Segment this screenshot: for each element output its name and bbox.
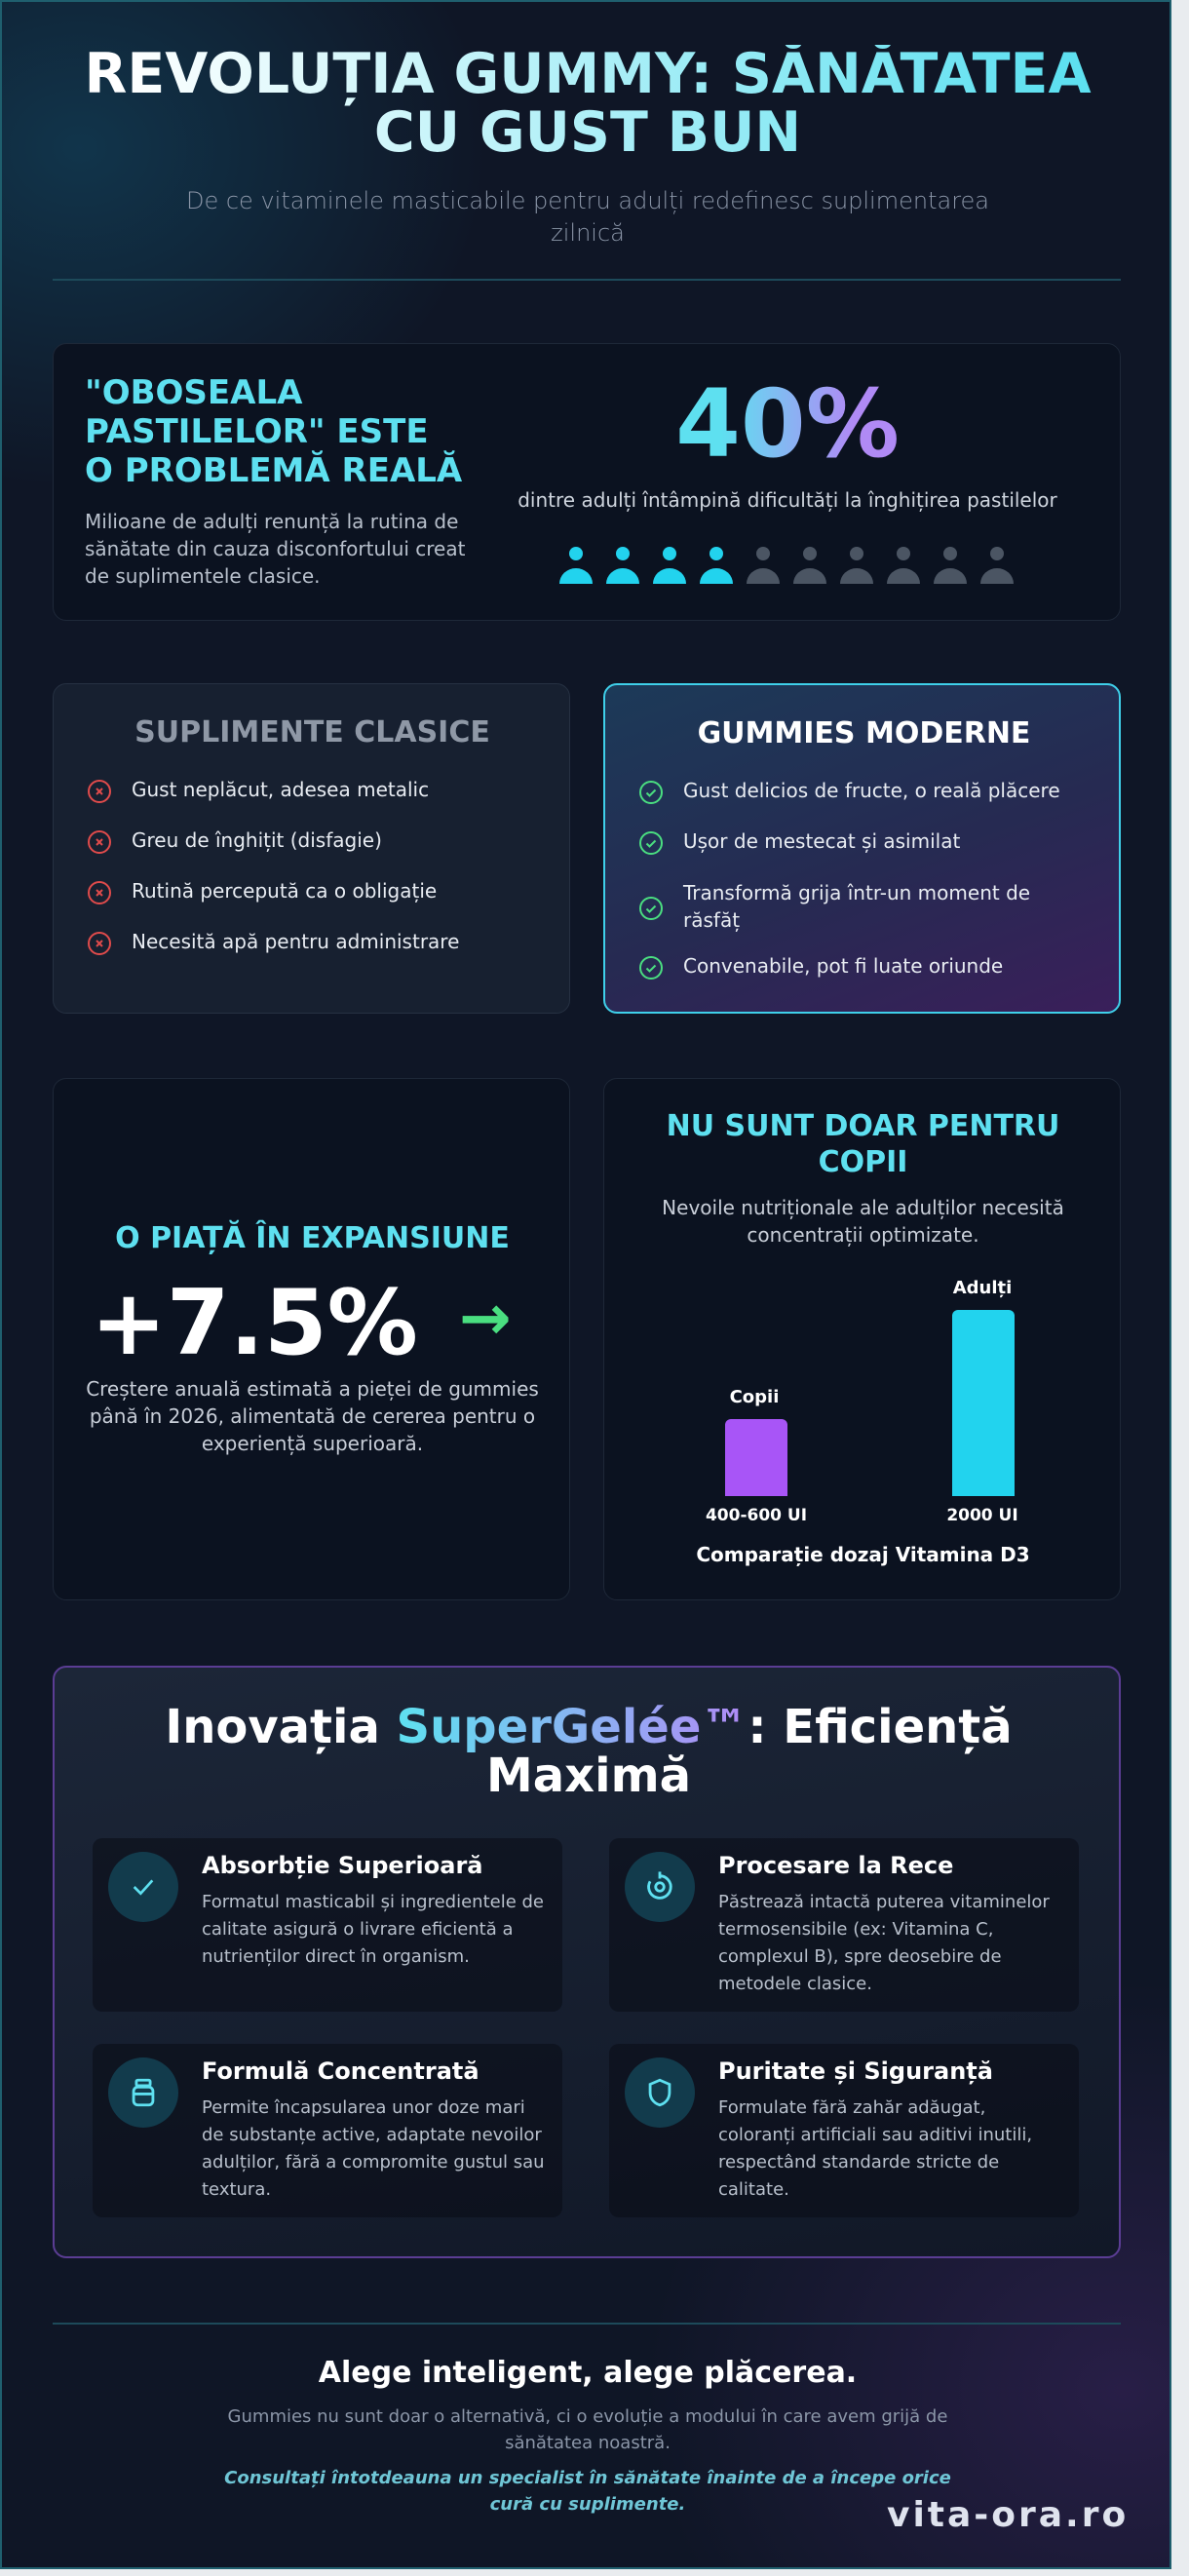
title: REVOLUȚIA GUMMY: SĂNĂTATEA xyxy=(84,42,1092,106)
title: CU GUST BUN xyxy=(374,100,801,165)
card: absorption: Absorbție Superioară xyxy=(202,1852,482,1879)
caption: Comparație dozaj Vitamina D3 xyxy=(696,1543,1030,1566)
arrow: → xyxy=(459,1283,512,1355)
bar chart: Adulți xyxy=(953,1278,1012,1298)
list: Rutină percepută ca o obligație xyxy=(132,879,437,903)
stat: +7.5% xyxy=(91,1270,418,1375)
text: Creștere anuală estimată a pieței de gummies până în 2026, alimentată de cererea pentru o experiență superioară. xyxy=(86,1377,539,1455)
panel: classic supplements xyxy=(53,683,570,1014)
list: Greu de înghițit (disfagie) xyxy=(132,828,382,852)
card: cold processing: Păstrează intactă puterea vitaminelor termosensibile (ex: Vitamina C, complexul B), spre deosebire de metodele clasice. xyxy=(718,1892,1050,1994)
bar chart xyxy=(706,1278,1018,1525)
stat caption: dintre adulți întâmpină dificultăți la înghițirea pastilelor xyxy=(518,488,1057,512)
panel: market xyxy=(53,1078,570,1600)
bar chart: 400-600 UI xyxy=(706,1506,807,1525)
card: concentrated xyxy=(93,2044,562,2217)
panel: SuperGelée innovation xyxy=(53,1666,1121,2258)
list: Transformă grija într-un moment de răsfăț xyxy=(683,881,1030,932)
subtitle: De ce vitaminele masticabile pentru adulți redefinesc suplimentarea zilnică xyxy=(186,187,989,247)
heading: "OBOSEALA xyxy=(85,373,302,412)
stat 40%: 40% xyxy=(675,369,900,479)
icon: shield xyxy=(625,2057,695,2128)
panel: pill fatigue xyxy=(53,343,1121,621)
paragraph: Milioane de adulți renunță la rutina de sănătate din cauza disconfortului creat de suplimentele clasice. xyxy=(85,510,465,588)
icon: snow xyxy=(625,1852,695,1922)
list: Gust delicios de fructe, o reală plăcere xyxy=(683,779,1060,802)
list xyxy=(639,779,1060,980)
panel: not just for kids xyxy=(603,1078,1121,1600)
heading: SUPLIMENTE CLASICE xyxy=(134,715,490,750)
title xyxy=(2,45,1173,162)
card: absorption xyxy=(93,1838,562,2012)
list: Gust neplăcut, adesea metalic xyxy=(132,778,429,801)
heading: Inovația SuperGelée™: Eficiență Maximă xyxy=(165,1700,1013,1803)
card: cold processing xyxy=(609,1838,1079,2012)
icon: check xyxy=(108,1852,178,1922)
heading: O PROBLEMĂ REALĂ xyxy=(85,451,462,490)
icon: jar xyxy=(108,2057,178,2128)
card: concentrated: Permite încapsularea unor doze mari de substanțe active, adaptate nevoilor adulților, fără a compromite gustul sau textura. xyxy=(202,2097,545,2200)
list: Convenabile, pot fi luate oriunde xyxy=(683,954,1003,978)
heading: PASTILELOR" ESTE xyxy=(85,412,429,451)
brand: vita-ora.ro xyxy=(887,2495,1129,2535)
card: purity xyxy=(609,2044,1079,2217)
bar chart: Copii xyxy=(730,1387,779,1407)
card: absorption: Formatul masticabil și ingredientele de calitate asigură o livrare eficientă a nutrienților direct în organism. xyxy=(202,1892,544,1967)
disclaimer: Consultați întotdeauna un specialist în sănătate înainte de a începe orice cură cu suplimente. xyxy=(224,2468,951,2515)
card: concentrated: Formulă Concentrată xyxy=(202,2057,479,2085)
heading: GUMMIES MODERNE xyxy=(698,716,1030,750)
list xyxy=(88,778,459,955)
heading: O PIAȚĂ ÎN EXPANSIUNE xyxy=(115,1221,510,1255)
footer heading: Alege inteligent, alege plăcerea. xyxy=(319,2356,857,2390)
stat 40% xyxy=(512,369,1063,479)
heading: NU SUNT DOAR PENTRU COPII xyxy=(667,1109,1059,1179)
list: Necesită apă pentru administrare xyxy=(132,930,459,953)
card: purity: Puritate și Siguranță xyxy=(718,2057,993,2085)
heading xyxy=(85,373,462,490)
list: Ușor de mestecat și asimilat xyxy=(683,829,960,853)
card: cold processing: Procesare la Rece xyxy=(718,1852,953,1879)
panel: modern gummies xyxy=(603,683,1121,1014)
icon row: people xyxy=(559,547,1014,584)
text: Nevoile nutriționale ale adulților necesită concentrații optimizate. xyxy=(662,1196,1064,1247)
card: purity: Formulate fără zahăr adăugat, coloranți artificiali sau aditivi inutili, respectând standarde stricte de calitate. xyxy=(718,2097,1032,2200)
footer text: Gummies nu sunt doar o alternativă, ci o evoluție a modului în care avem grijă de sănătatea noastră. xyxy=(228,2406,947,2453)
bar chart: 2000 UI xyxy=(946,1506,1018,1525)
